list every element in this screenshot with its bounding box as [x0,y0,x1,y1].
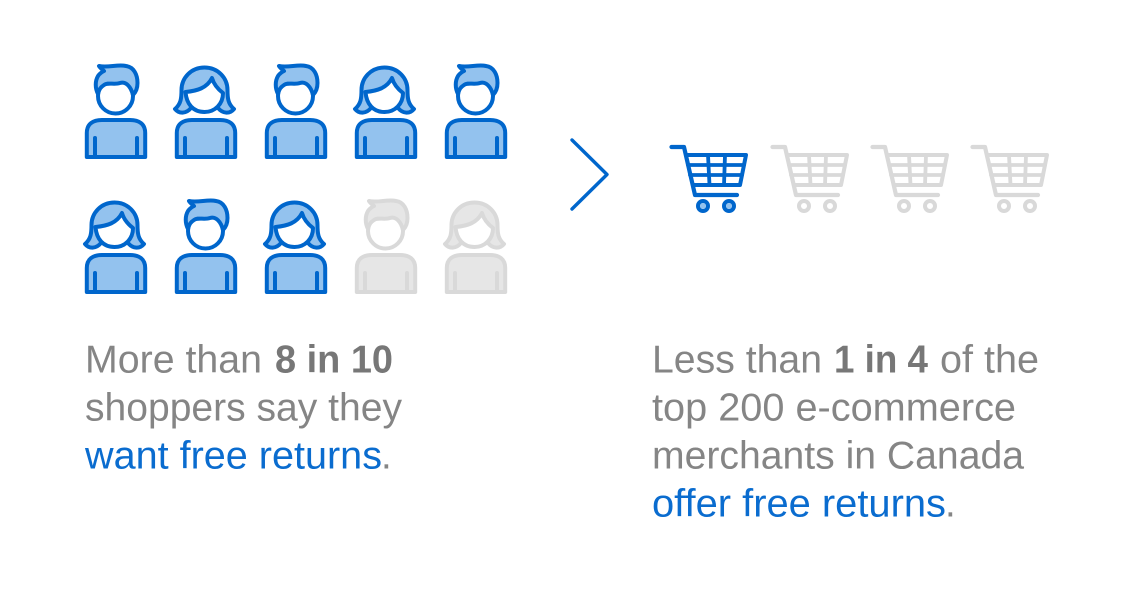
person 9: man, greyed out [357,200,415,292]
text block: shoppers statistic: More than [85,338,262,382]
text block: shoppers statistic: want free returns [84,434,382,478]
text block: merchants statistic: Less than [652,338,822,382]
text block: merchants statistic: 1 in 4 [834,338,929,382]
cart row: 1 in 4 merchants [672,147,1047,211]
cart 1: highlighted [672,147,746,211]
text block: shoppers statistic [84,338,403,478]
person 2: woman, highlighted [175,68,235,157]
cart 4: greyed out [972,147,1047,211]
text block: shoppers statistic: . [381,434,392,478]
person 4: woman, highlighted [355,68,415,157]
person 6: woman, highlighted [85,202,145,292]
person 7: man, highlighted [177,200,235,292]
arrow: chevron pointing right [572,140,607,209]
people grid: 8 in 10 shoppers [85,65,505,292]
text block: merchants statistic: offer free returns [652,482,946,526]
text block: shoppers statistic: 8 in 10 [275,338,393,382]
person 5: man, highlighted [447,65,505,157]
cart 2: greyed out [772,147,847,211]
text block: merchants statistic: merchants in Canada [652,434,1025,478]
person 1: man, highlighted [87,65,145,157]
text block: merchants statistic: of the [940,338,1039,382]
text block: merchants statistic [652,338,1039,526]
text block: shoppers statistic: shoppers say they [85,386,403,430]
text block: merchants statistic: . [945,482,956,526]
person 10: woman, greyed out [445,202,505,292]
person 8: woman, highlighted [265,202,325,292]
text block: merchants statistic: top 200 e-commerce [652,386,1016,430]
cart 3: greyed out [872,147,947,211]
person 3: man, highlighted [267,65,325,157]
